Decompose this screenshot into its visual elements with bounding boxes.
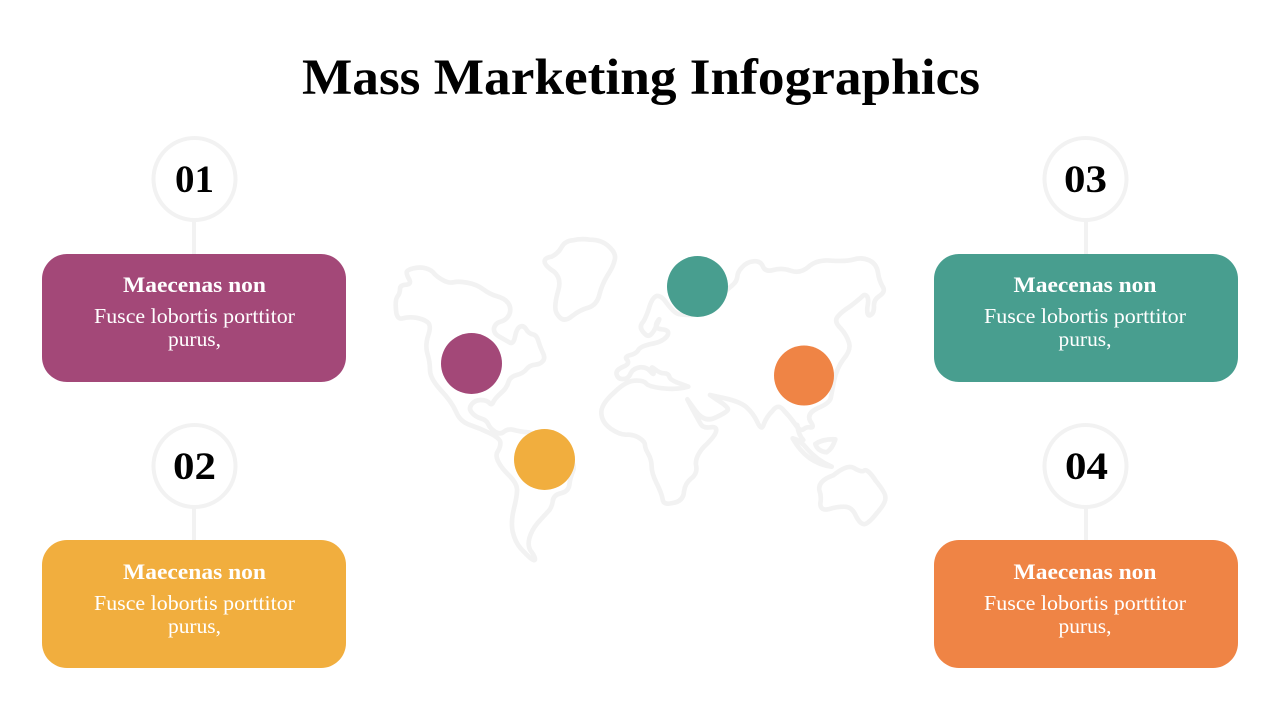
panel: 02 yellow [42, 425, 346, 668]
title: Mass Marketing Infographics [302, 50, 980, 106]
number badge 01 [154, 138, 236, 220]
card heading 01: Maecenas non [123, 272, 266, 297]
card text 01: purus, [168, 327, 221, 351]
map dot: yellow [514, 429, 575, 490]
card heading 02: Maecenas non [123, 559, 266, 584]
card heading 03: Maecenas non [1014, 272, 1156, 297]
card text 01: Fusce lobortis porttitor [94, 304, 295, 328]
card text 04: Fusce lobortis porttitor [984, 591, 1186, 615]
card 03 [934, 254, 1238, 382]
map dot: teal [667, 256, 728, 317]
map: Africa, Eurasia and Australia [601, 258, 885, 524]
card 02 [42, 540, 346, 668]
number badge 03 [1044, 138, 1126, 220]
connector 04 [1084, 507, 1088, 542]
card 01 [42, 254, 346, 382]
number 02: 02 [173, 445, 216, 488]
number 03: 03 [1064, 158, 1107, 201]
world map outline [396, 239, 885, 560]
card text 03: purus, [1058, 327, 1112, 351]
connector 03 [1084, 220, 1088, 256]
connector 02 [192, 507, 196, 542]
panel: 03 teal [934, 138, 1238, 382]
card text 04: purus, [1058, 614, 1112, 638]
number 01: 01 [175, 158, 214, 201]
number badge 04 [1044, 425, 1126, 507]
card text 02: Fusce lobortis porttitor [94, 591, 295, 615]
connector 01 [192, 220, 196, 256]
map dot: purple [441, 333, 502, 394]
map: Americas and Greenland [396, 239, 615, 560]
card 04 [934, 540, 1238, 668]
card heading 04: Maecenas non [1014, 559, 1156, 584]
card text 02: purus, [168, 614, 221, 638]
number badge 02 [154, 425, 236, 507]
map dot: orange [774, 346, 834, 406]
panel: 01 purple [42, 138, 346, 382]
card text 03: Fusce lobortis porttitor [984, 304, 1186, 328]
number 04: 04 [1065, 445, 1108, 488]
panel: 04 orange [934, 425, 1238, 668]
